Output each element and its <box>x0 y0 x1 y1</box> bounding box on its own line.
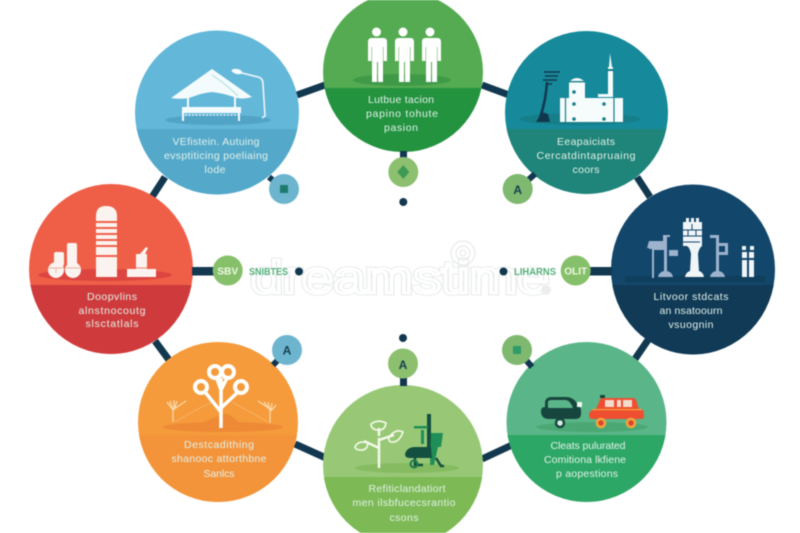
node: teal A <box>503 174 535 204</box>
text block: blue circle <box>164 136 268 176</box>
panel: orange circle <box>138 342 298 502</box>
node: left label <box>192 256 303 286</box>
text block: navy circle: Litvoor stdcats <box>654 291 728 303</box>
panel: red circle <box>29 184 193 354</box>
watermark: dreamstime <box>251 252 549 303</box>
text block: red circle: slsctatlals <box>86 318 138 330</box>
node: bottom A with dot: A <box>399 358 408 372</box>
icon: industrial posts and tower <box>625 218 765 282</box>
watermark <box>251 241 551 303</box>
icon: trailer and red car <box>536 395 648 432</box>
text block: lime circle <box>352 483 456 524</box>
text block: green circle: p aopestions <box>556 468 618 480</box>
panel: teal circle <box>505 31 668 194</box>
node: blue square <box>269 174 299 204</box>
panel: top green circle <box>323 0 483 152</box>
node: bottom A with dot <box>388 334 418 386</box>
watermark: dreamstime <box>251 252 549 303</box>
panel: blue circle <box>135 30 299 194</box>
text block: teal circle <box>536 136 636 176</box>
text block: blue circle: VEfistein. Autuing <box>172 136 260 148</box>
text block: green circle <box>544 440 626 480</box>
text block: lime circle: Refiticlandatiort <box>368 483 446 495</box>
text block: red circle <box>78 291 146 330</box>
node: right label <box>500 256 612 286</box>
icon: pavilion and street lamp <box>165 68 271 125</box>
text block: red circle: Doopvlins <box>87 291 137 303</box>
text block: green circle: Comitiona lkfiene <box>544 454 626 466</box>
text block: teal circle: Cercatdintapruaing <box>536 150 636 162</box>
text block: green circle: Cleats pulurated <box>550 440 626 452</box>
panel: green circle <box>506 342 666 502</box>
text block: lime circle: csons <box>390 512 418 524</box>
icon: factory and lever <box>520 53 640 125</box>
icon: tree with wheat <box>163 366 283 432</box>
text block: blue circle: evsptiticing poeliaing <box>164 150 268 162</box>
text block: top circle <box>366 94 438 134</box>
ring connectors <box>152 85 650 459</box>
icon: three people <box>353 28 451 86</box>
node: teal A: A <box>513 183 522 197</box>
text block: top circle: papino tohute <box>366 108 438 120</box>
panel: navy circle <box>611 184 775 354</box>
node: top diamond with dot <box>388 151 418 206</box>
icon: tower, cylinders and blocks <box>38 206 172 281</box>
node: right label: OLIT <box>564 266 588 278</box>
icon: sapling and wheeled machine <box>355 414 459 473</box>
text block: orange circle: Sanlcs <box>204 468 234 480</box>
node: left label: SBV <box>217 266 238 278</box>
text block: top circle: pasion <box>384 122 418 134</box>
text block: blue circle: lode <box>204 164 226 176</box>
node: left label: SNIBTES <box>249 267 288 278</box>
text block: lime circle: men ilsbfucecsrantio <box>352 497 456 509</box>
text block: teal circle: coors <box>572 164 600 176</box>
text block: orange circle <box>172 439 267 480</box>
text block: top circle: Lutbue tacion <box>368 94 434 106</box>
node: green square <box>502 335 532 367</box>
node: orange A: A <box>283 344 292 358</box>
text block: orange circle: Destcadithing <box>184 439 254 451</box>
node: right label: LIHARNS <box>514 267 556 278</box>
text block: teal circle: Eeapaiciats <box>557 136 615 148</box>
text block: orange circle: shanooc attorthbne <box>172 453 267 465</box>
text block: navy circle: an nsatoourn <box>660 305 723 317</box>
panel: lime circle <box>323 385 483 533</box>
text block: red circle: alnstnocoutg <box>78 305 146 317</box>
node: orange A <box>272 335 302 365</box>
text block: navy circle <box>654 291 728 331</box>
text block: navy circle: vsuognin <box>668 319 714 331</box>
